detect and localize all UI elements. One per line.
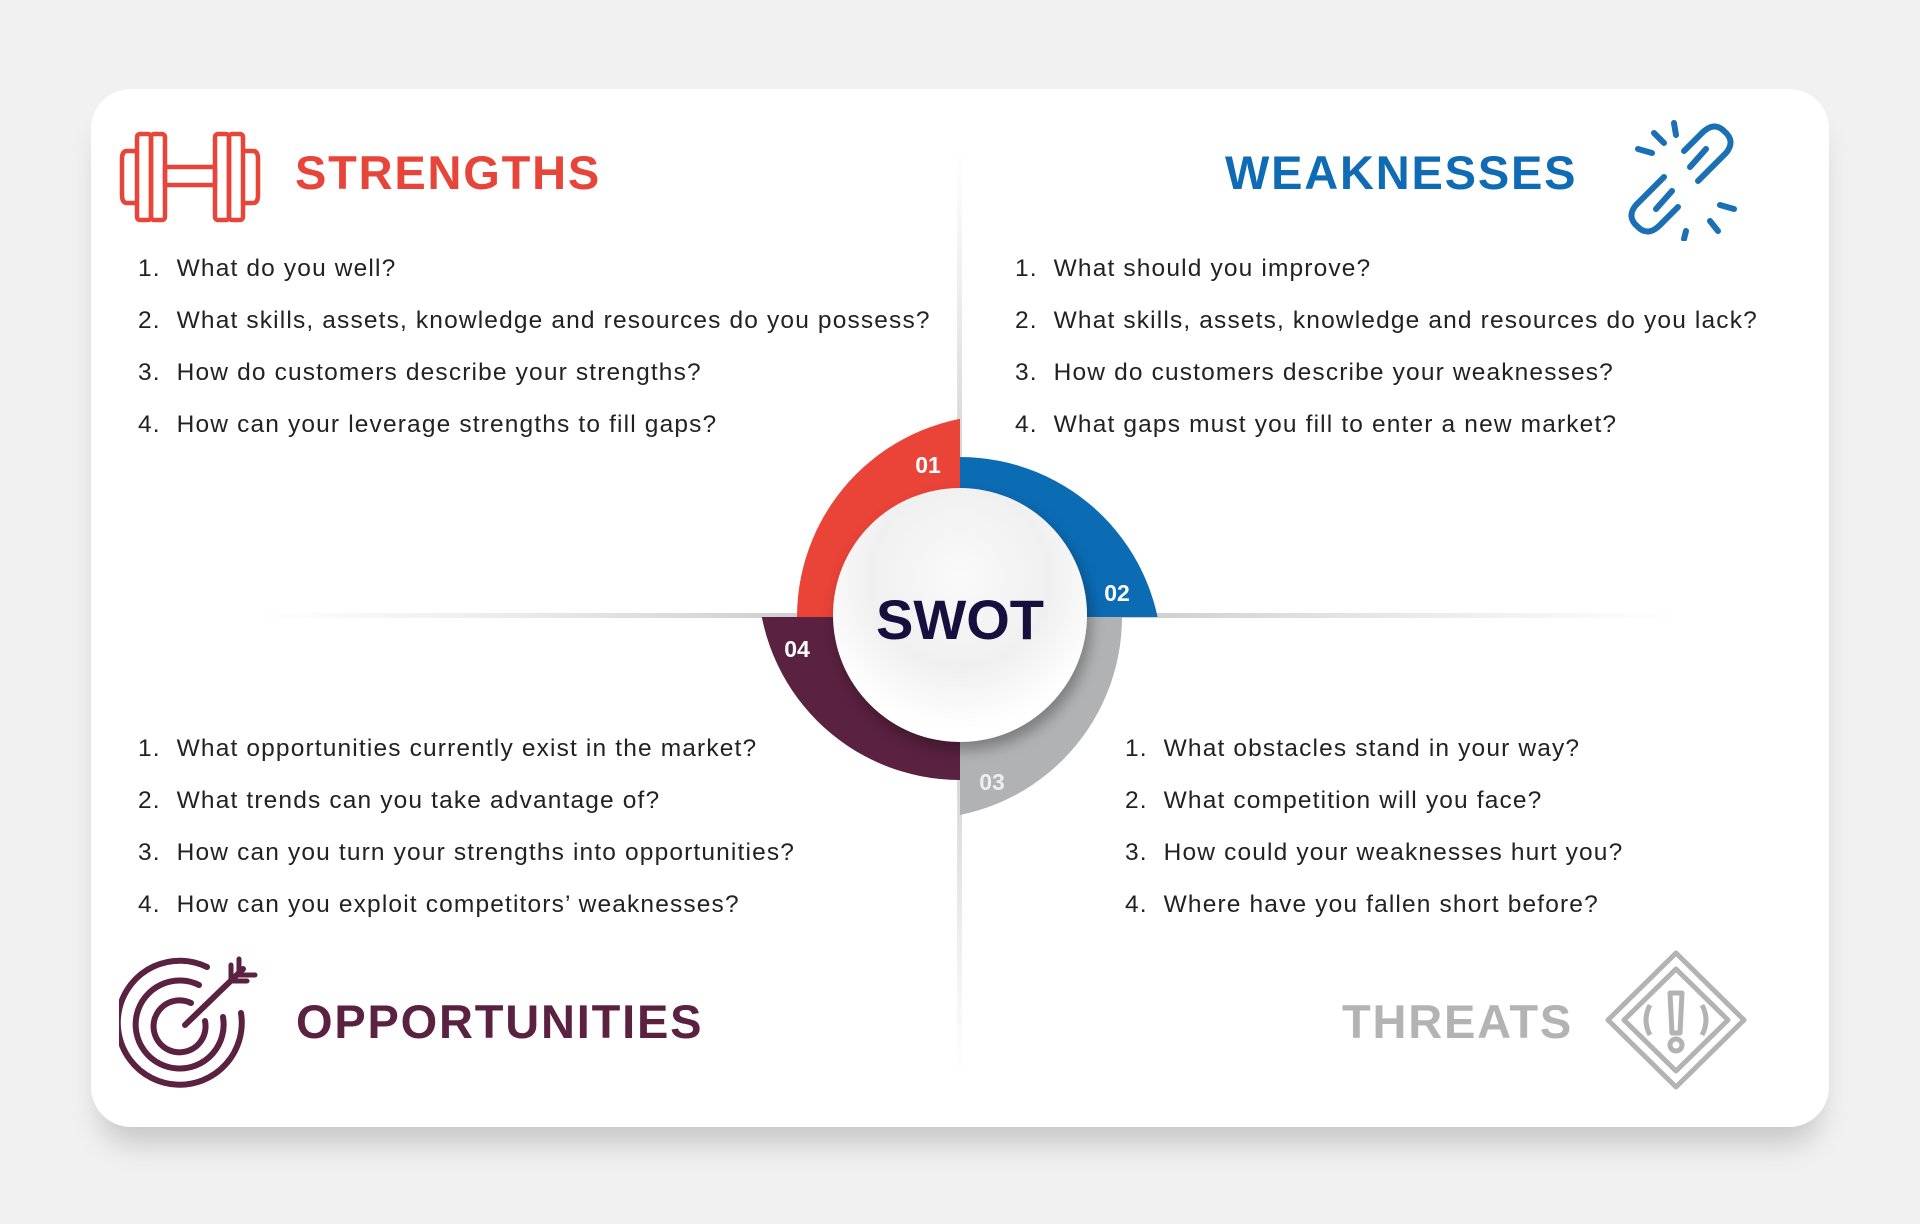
list: strengths: 1. What do you well? [138,255,396,282]
list: strengths [138,255,931,438]
card [91,89,1829,1127]
heading: opportunities: OPPORTUNITIES [296,995,703,1048]
list: opportunities: 1. What opportunities currently exist in the market? [138,735,757,762]
heading: weaknesses: WEAKNESSES [1225,146,1577,199]
center circle SWOT [833,488,1087,742]
segment 04 purple [762,617,960,780]
list: opportunities [138,735,795,918]
list: weaknesses: 1. What should you improve? [1015,255,1371,282]
segment 01 red [797,418,960,617]
center circle SWOT: SWOT [876,588,1044,651]
list: threats: 2. What competition will you face? [1125,787,1542,814]
segment 01 red: 01 [915,452,941,478]
list: threats [1125,735,1623,918]
list: weaknesses [1015,255,1758,438]
icon: target [119,956,258,1088]
list: opportunities: 3. How can you turn your strengths into opportunities? [138,839,795,866]
list: weaknesses: 4. What gaps must you fill to enter a new market? [1015,411,1617,438]
list: threats: 1. What obstacles stand in your way? [1125,735,1580,762]
segment 03 gray: 03 [979,769,1005,795]
list: threats: 4. Where have you fallen short before? [1125,891,1599,918]
swot center graphic [762,418,1158,815]
segment 02 blue: 02 [1104,580,1130,606]
list: weaknesses: 2. What skills, assets, knowledge and resources do you lack? [1015,307,1758,334]
list: strengths: 2. What skills, assets, knowledge and resources do you possess? [138,307,931,334]
list: threats: 3. How could your weaknesses hurt you? [1125,839,1623,866]
heading: strengths: STRENGTHS [295,146,601,199]
segment 02 blue [960,457,1158,617]
list: strengths: 4. How can your leverage strengths to fill gaps? [138,411,717,438]
list: strengths: 3. How do customers describe your strengths? [138,359,702,386]
icon: warning diamond [1606,950,1746,1090]
segment 04 purple: 04 [784,636,810,662]
segment 03 gray [960,617,1122,815]
icon: broken chain [1628,120,1737,241]
list: opportunities: 4. How can you exploit competitors’ weaknesses? [138,891,740,918]
list: opportunities: 2. What trends can you take advantage of? [138,787,660,814]
list: weaknesses: 3. How do customers describe your weaknesses? [1015,359,1614,386]
icon: dumbbell [120,132,260,222]
heading: threats: THREATS [1342,995,1573,1048]
